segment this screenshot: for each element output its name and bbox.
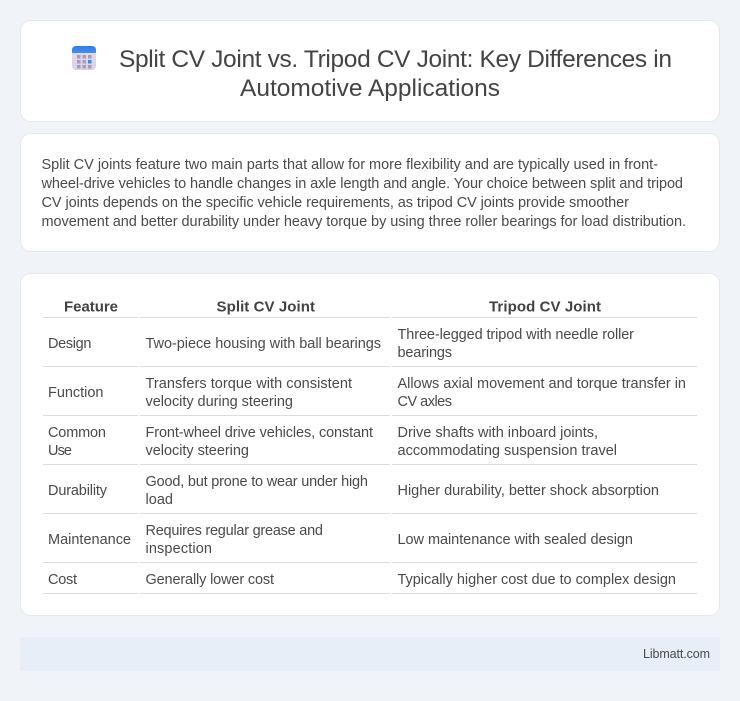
row: maintenance: Maintenance — [48, 532, 131, 548]
text block: introduction: wheel-drive vehicles to handle changes in axle length and angle. Your choice between split and tripod — [40, 176, 683, 192]
footer — [20, 637, 720, 671]
row: common use: velocity steering — [146, 443, 249, 459]
row: durability — [48, 474, 659, 508]
text block: introduction: Split CV joints feature two main parts that allow for more flexibility and are typically used in front- — [42, 157, 658, 173]
table header row: Tripod CV Joint — [489, 298, 601, 316]
row: durability: Durability — [48, 483, 108, 499]
text block: introduction: movement and better durability under heavy torque by using three roller bearings for load distribution. — [42, 214, 686, 230]
row: maintenance: Low maintenance with sealed design — [398, 532, 633, 548]
row: durability: load — [146, 492, 173, 508]
icon: calendar — [72, 46, 96, 70]
row: function: CV axles — [398, 394, 452, 410]
row: common use: Drive shafts with inboard joints, — [398, 425, 598, 441]
footer credit: Libmatt.com — [643, 647, 710, 661]
table header row — [64, 298, 601, 316]
table header row: Feature — [64, 298, 118, 316]
row: function: Transfers torque with consistent — [146, 376, 352, 392]
row: common use — [48, 425, 617, 459]
row: design: bearings — [398, 345, 452, 361]
row: design: Design — [48, 336, 92, 352]
row: durability: Good, but prone to wear under high — [146, 474, 368, 490]
row: function: velocity during steering — [146, 394, 293, 410]
row: maintenance — [48, 523, 633, 557]
row: maintenance: inspection — [146, 541, 212, 557]
table header row: Split CV Joint — [216, 298, 315, 316]
row: function: Allows axial movement and torque transfer in — [398, 376, 686, 392]
panel: title card — [20, 20, 720, 122]
row: common use: accommodating suspension travel — [398, 443, 617, 459]
row: design — [48, 327, 634, 361]
row: design: Three-legged tripod with needle roller — [398, 327, 634, 343]
row: maintenance: Requires regular grease and — [146, 523, 323, 539]
row: function: Function — [48, 385, 104, 401]
row: cost: Cost — [48, 572, 77, 588]
title: Automotive Applications — [240, 75, 500, 102]
row: common use: Use — [48, 443, 72, 459]
row: cost — [48, 572, 676, 588]
title — [119, 46, 672, 102]
row: cost: Typically higher cost due to complex design — [398, 572, 676, 588]
text block: introduction: CV joints depends on the specific vehicle requirements, as tripod CV joints provide smoother — [42, 195, 629, 211]
row: design: Two-piece housing with ball bearings — [146, 336, 381, 352]
text block: introduction — [40, 157, 686, 230]
row: durability: Higher durability, better shock absorption — [398, 483, 659, 499]
row: function — [48, 376, 686, 410]
panel: comparison table — [20, 274, 720, 616]
row: common use: Common — [48, 425, 106, 441]
row: cost: Generally lower cost — [146, 572, 274, 588]
title: Split CV Joint vs. Tripod CV Joint: Key Differences in — [119, 46, 672, 73]
panel: intro paragraph — [20, 134, 720, 252]
row: common use: Front-wheel drive vehicles, constant — [146, 425, 373, 441]
